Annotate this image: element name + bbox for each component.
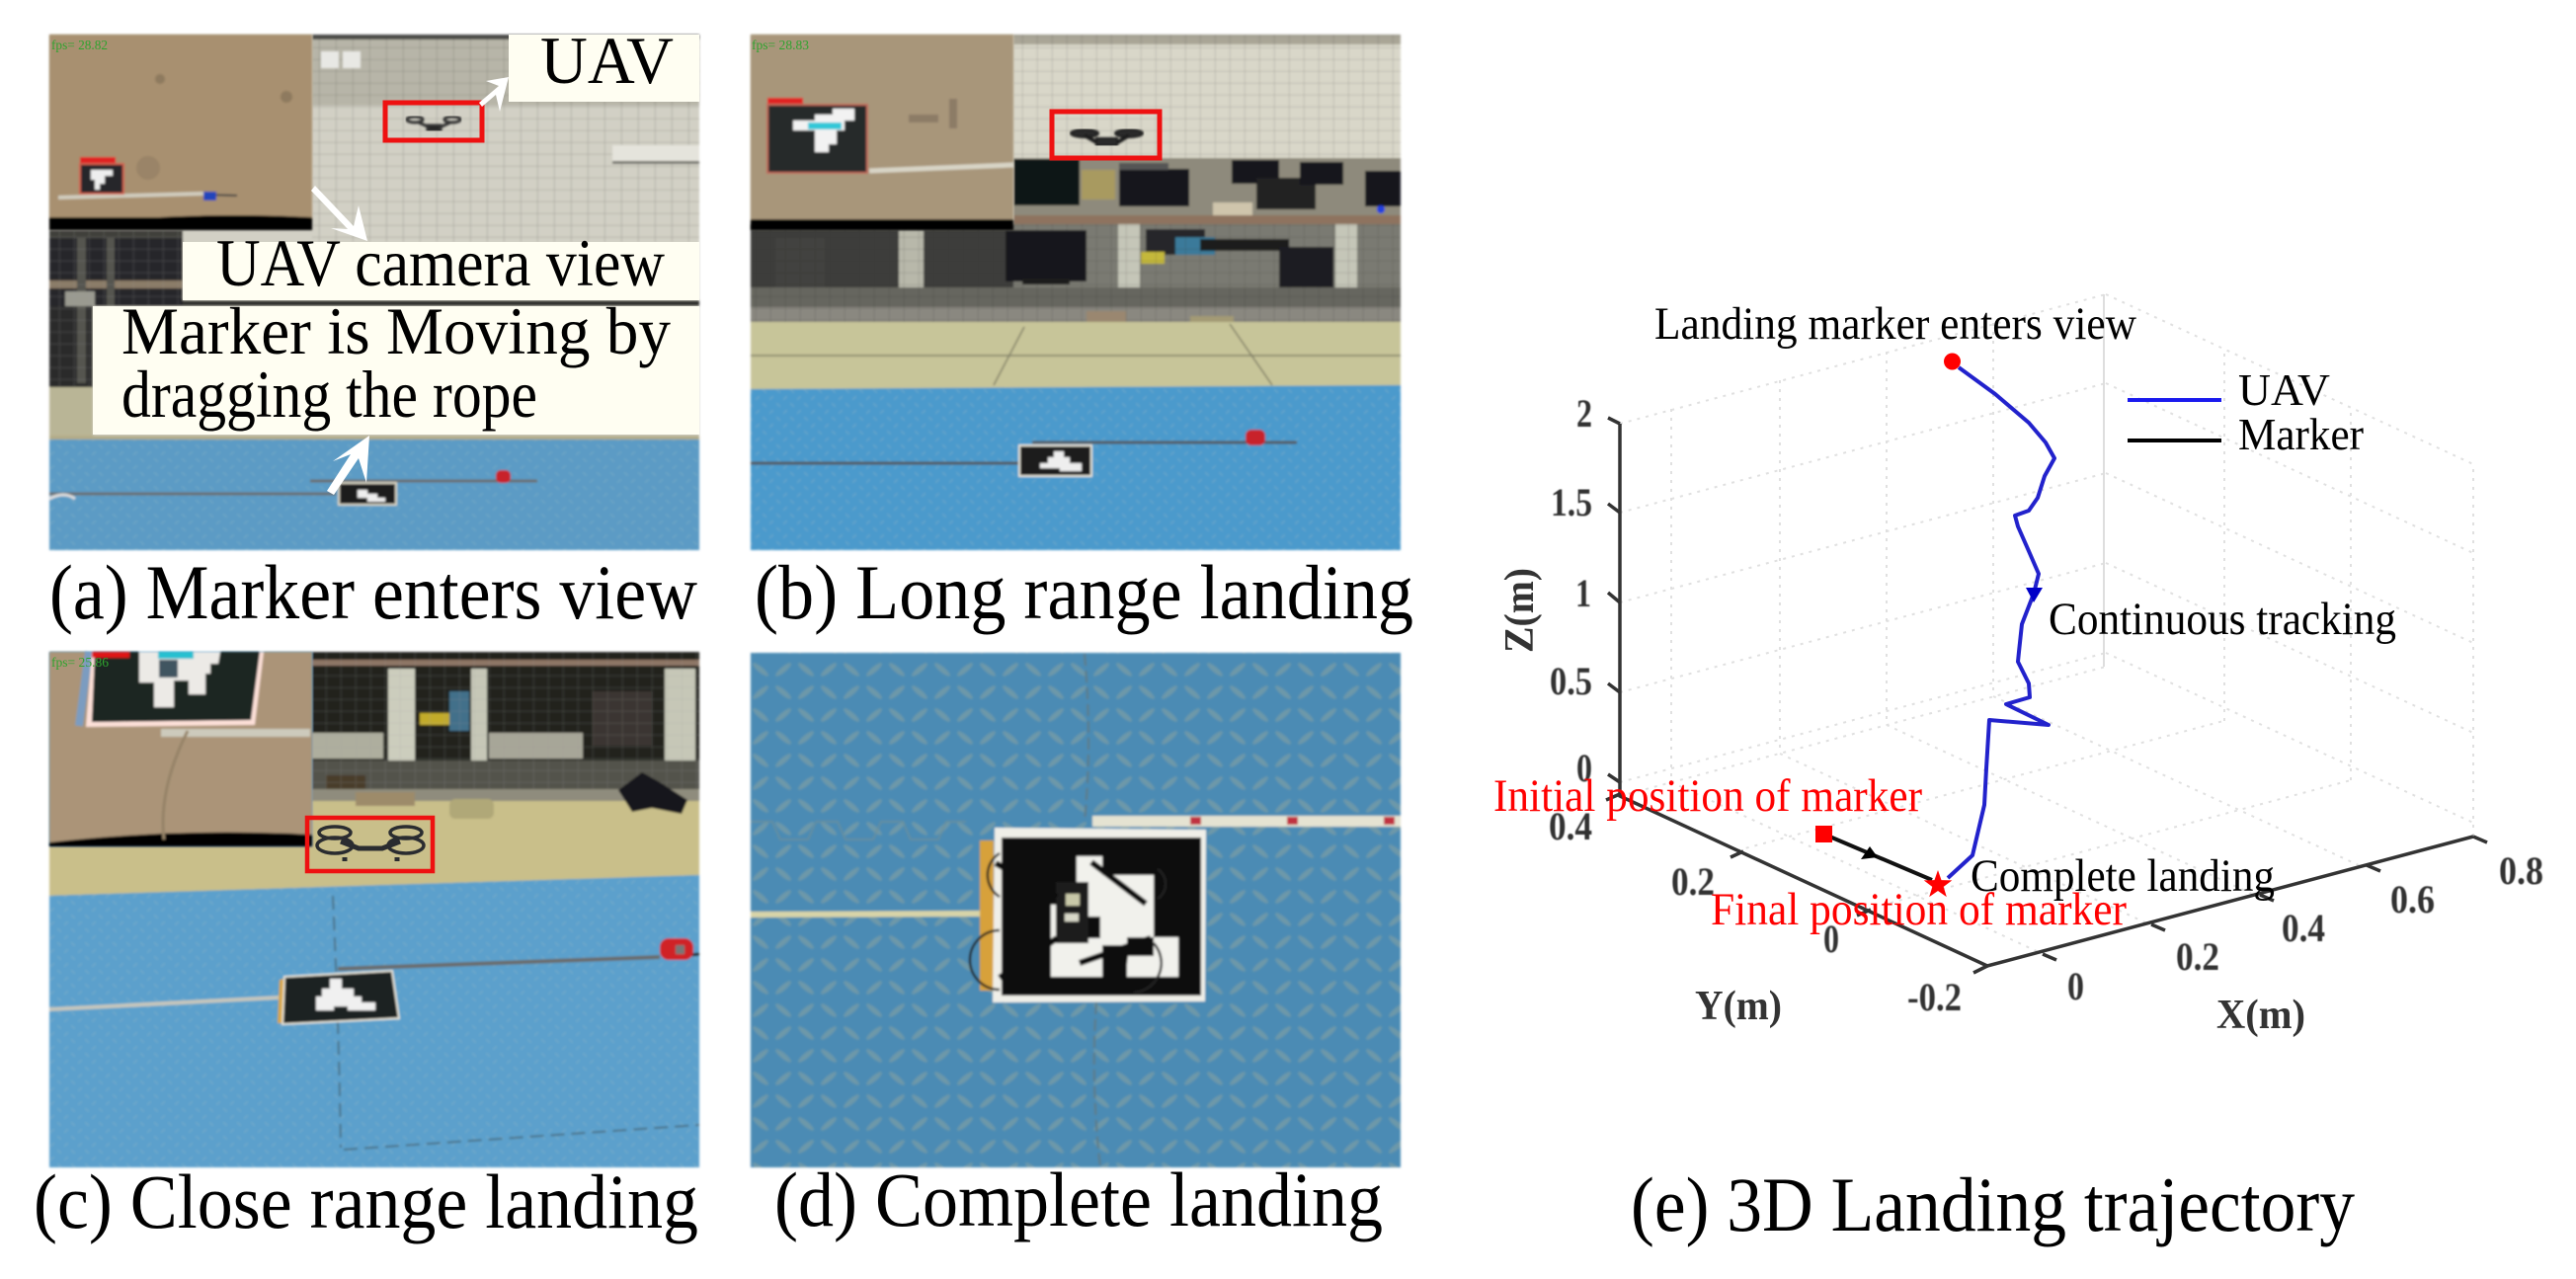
label: marker is moving: Marker is Moving by — [121, 293, 671, 368]
y tick labels: -0.2 — [1907, 975, 1962, 1019]
annotation: initial position of marker: Initial position of marker — [1493, 770, 1922, 822]
y tick labels: 0 — [1823, 917, 1839, 961]
icon: final marker position — [1924, 870, 1952, 897]
annotation: landing marker enters view: Landing marker enters view — [1654, 298, 2136, 350]
caption a: (a) Marker enters view — [49, 549, 697, 635]
photo a: lab scene — [49, 35, 699, 550]
icon: start point — [1944, 354, 1961, 369]
camera inset c — [49, 652, 312, 846]
z axis label: Z(m) — [1497, 568, 1543, 653]
legend: Marker — [2238, 409, 2364, 459]
arrow to marker — [327, 436, 369, 495]
x tick labels: 0.8 — [2499, 848, 2543, 893]
label: marker is moving — [93, 293, 699, 435]
marker trajectory line — [1827, 836, 1932, 880]
label: UAV — [509, 23, 699, 102]
icon: initial marker position — [1815, 826, 1832, 842]
panel b: long range landing — [751, 35, 1401, 550]
x axis label: X(m) — [2216, 993, 2305, 1038]
panel c: close range landing — [49, 652, 699, 1167]
legend — [2128, 364, 2364, 459]
icon: marker direction arrow — [1861, 846, 1878, 859]
red box around UAV b — [1052, 112, 1160, 158]
fps readout c: fps= 25.86 — [51, 656, 109, 671]
icon: drone b — [1071, 129, 1143, 145]
annotation: complete landing: Complete landing — [1971, 850, 2275, 902]
caption d: (d) Complete landing — [774, 1157, 1383, 1242]
z tick labels: 1.5 — [1551, 480, 1592, 524]
caption e: (e) 3D Landing trajectory — [1631, 1161, 2355, 1247]
red box around UAV a — [385, 103, 482, 140]
label: UAV camera view: UAV camera view — [216, 225, 665, 300]
annotation: final position of marker: Final position of marker — [1711, 884, 2127, 935]
x tick labels — [2067, 848, 2543, 1008]
UAV trajectory line — [1948, 367, 2054, 878]
z tick labels: 0 — [1576, 746, 1592, 790]
z tick labels — [1550, 391, 1592, 790]
caption c: (c) Close range landing — [34, 1159, 698, 1244]
fps readout b: fps= 28.83 — [752, 39, 809, 53]
annotation: continuous tracking: Continuous tracking — [2049, 594, 2396, 645]
y tick labels — [1549, 804, 1962, 1019]
icon: trajectory direction arrow — [2026, 588, 2043, 602]
camera inset a — [49, 35, 312, 230]
fps readout a: fps= 28.82 — [51, 39, 108, 53]
icon: drone a — [407, 117, 460, 130]
caption b: (b) Long range landing — [755, 549, 1413, 635]
axes — [1606, 418, 2487, 973]
z tick labels: 2 — [1576, 391, 1592, 436]
z tick labels: 0.5 — [1550, 659, 1592, 703]
y tick labels: 0.2 — [1671, 859, 1715, 904]
label: UAV: UAV — [540, 23, 674, 98]
icon: drone c — [317, 827, 424, 861]
panel a: marker enters view — [49, 23, 699, 550]
photo c: floor and rack — [49, 652, 699, 1167]
photo b: lab scene — [751, 35, 1401, 550]
y axis label: Y(m) — [1695, 984, 1782, 1029]
x tick labels: 0.2 — [2176, 934, 2219, 979]
3D grid box — [1620, 294, 2473, 952]
legend: UAV — [2238, 364, 2330, 415]
y tick labels: 0.4 — [1549, 804, 1592, 848]
panel e: 3D trajectory chart — [1493, 294, 2543, 1038]
z tick labels: 1 — [1575, 571, 1591, 615]
x tick labels: 0.6 — [2390, 877, 2435, 921]
red box around UAV c — [307, 818, 433, 871]
panel d: complete landing — [751, 653, 1401, 1167]
arrow to camera view — [311, 186, 367, 241]
arrow to UAV — [479, 77, 509, 112]
x tick labels: 0.4 — [2282, 906, 2325, 950]
camera inset b — [751, 35, 1013, 230]
photo d: drone on marker — [751, 653, 1401, 1167]
x tick labels: 0 — [2067, 964, 2084, 1008]
label: marker is moving: dragging the rope — [121, 357, 537, 432]
